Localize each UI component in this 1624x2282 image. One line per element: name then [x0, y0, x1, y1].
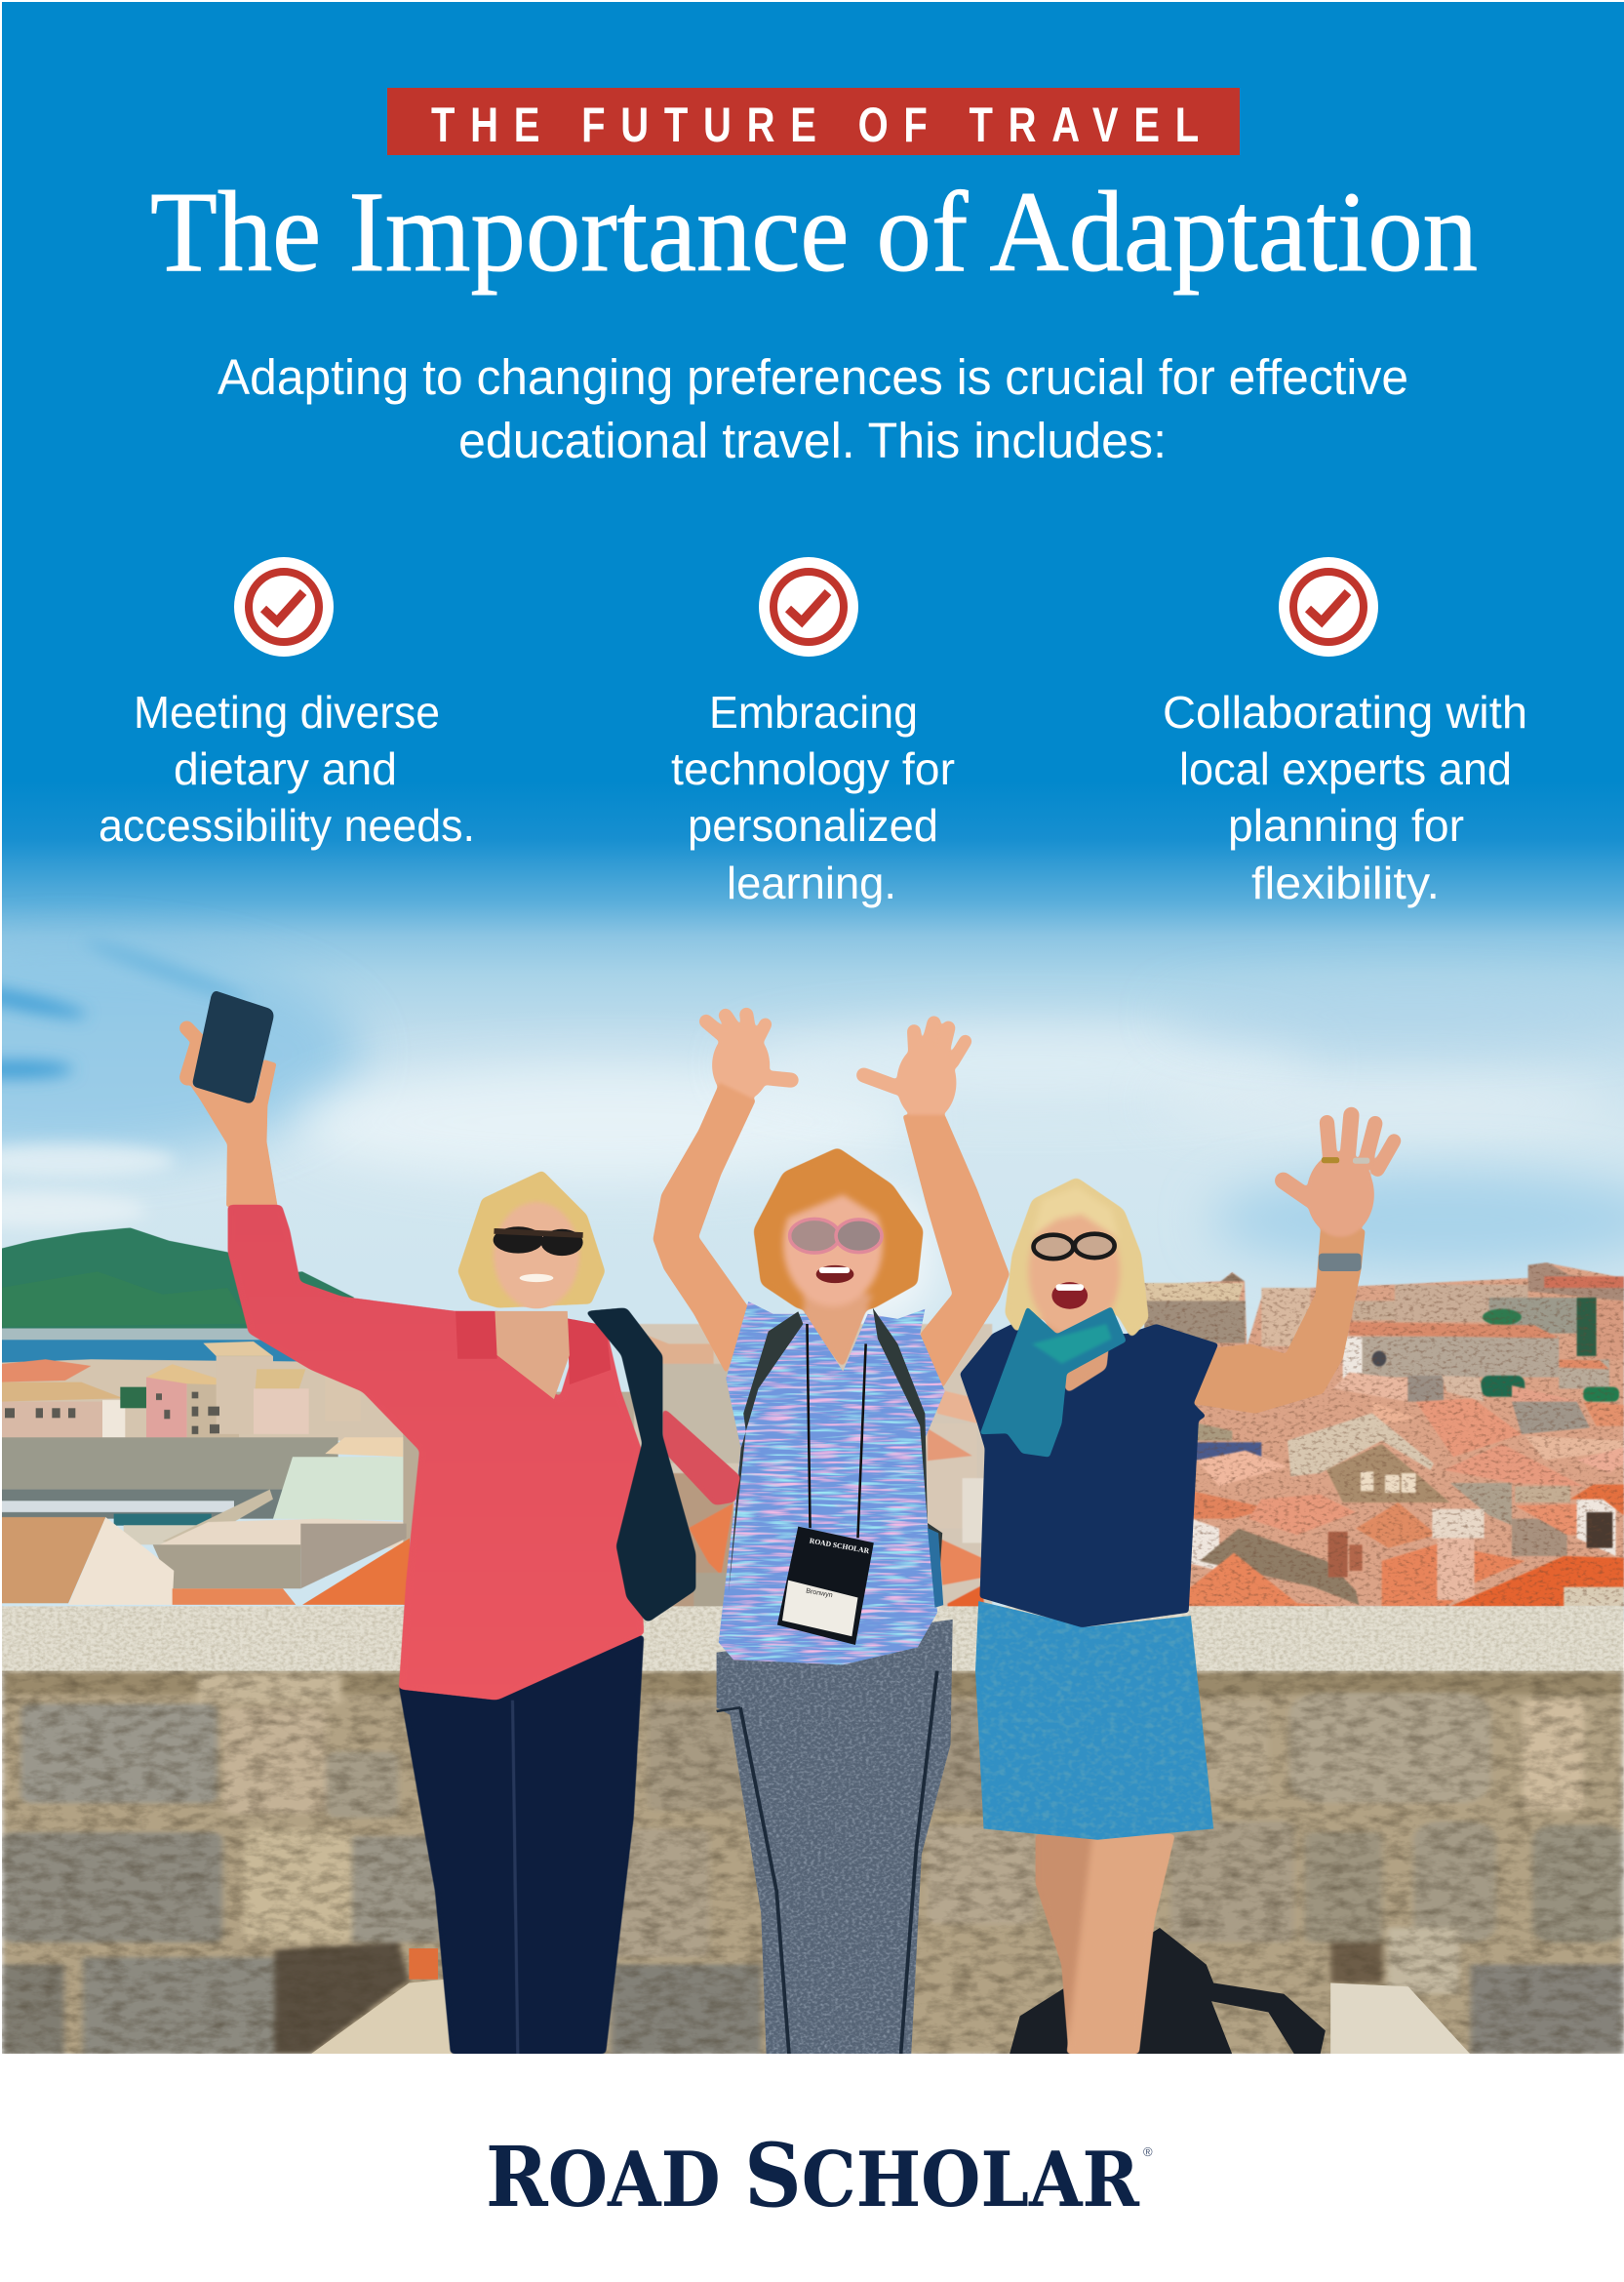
icon: check mark 1: [234, 557, 334, 657]
column: technology: [671, 557, 955, 908]
stone wall: [2, 1606, 1624, 2055]
column: technology: learning.: [727, 858, 896, 908]
head and red hair: [753, 1147, 924, 1369]
lanyard and name badge: ROAD SCHOLAR: [809, 1537, 870, 1555]
head and hair: [1005, 1178, 1149, 1393]
left edge frame: [0, 0, 2, 2054]
raised arms and hands: [653, 1015, 1010, 1388]
icon: check mark 2: [759, 557, 858, 657]
woman on right in navy tee and blue skirt: [960, 1115, 1394, 2054]
teal scarf: [979, 1306, 1127, 1458]
striped top: [719, 1301, 945, 1664]
raised arm, hand and phone: [181, 991, 278, 1207]
icon: check mark 3: [1279, 557, 1378, 657]
column: local experts: planning for: [1228, 800, 1464, 851]
head and blonde hair: [457, 1171, 605, 1308]
column: technology: Embracing: [709, 687, 918, 738]
background: right old town rooftops: [1144, 1262, 1624, 1607]
background: left old town and island: [0, 1227, 637, 1605]
intro text: [218, 349, 1408, 468]
column: dietary and accessibility: Meeting diverse: [134, 687, 440, 738]
lanyard and name badge: Bronwyn: [806, 1586, 833, 1599]
woman on left in coral top: [181, 991, 740, 2054]
background: blue sky: [2, 2, 1624, 1621]
raised arm: [1191, 1115, 1394, 1414]
title: The Importance of Adaptation: [150, 168, 1478, 296]
coral long-sleeved top: [228, 1205, 740, 1701]
skirt: [975, 1601, 1213, 1840]
intro text: educational travel. This includes:: [458, 413, 1167, 468]
woman on right: backpack at feet: [1010, 1928, 1326, 2054]
column: dietary and accessibility: [99, 557, 475, 851]
backpack straps: [729, 1308, 943, 1608]
woman in centre with blue striped top: [653, 1015, 1010, 2054]
logo: Road Scholar: ROAD SCHOLAR: [486, 2124, 1140, 2227]
clouds: [0, 935, 1624, 1327]
logo: Road Scholar: ®: [1143, 2144, 1153, 2159]
column: dietary and accessibility: accessibility needs.: [99, 800, 475, 851]
column: dietary and accessibility: dietary and: [174, 743, 397, 794]
column: local experts: flexibility.: [1251, 858, 1440, 908]
banner: the future of travel: THE FUTURE OF TRAVEL: [431, 98, 1199, 152]
pants: [399, 1634, 644, 2054]
column: technology: technology for: [671, 743, 955, 794]
column: local experts: local experts and: [1179, 743, 1512, 794]
photo: three travellers on the Dubrovnik city wall: [0, 935, 1624, 2055]
column: technology: personalized: [688, 800, 938, 851]
black jacket over shoulder: [585, 1307, 695, 1623]
intro text: Adapting to changing preferences is crucial for effective: [218, 349, 1408, 405]
column: local experts: [1163, 557, 1527, 908]
lanyard and name badge: [777, 1324, 874, 1645]
leggings: [717, 1620, 953, 2054]
icon: phone: [193, 991, 273, 1103]
legs: [1036, 1834, 1175, 2054]
navy tee: [960, 1324, 1218, 1627]
column: local experts: Collaborating with: [1163, 687, 1527, 738]
background: rooftops between the women: [634, 1324, 992, 1608]
white footer: [0, 2054, 1624, 2282]
